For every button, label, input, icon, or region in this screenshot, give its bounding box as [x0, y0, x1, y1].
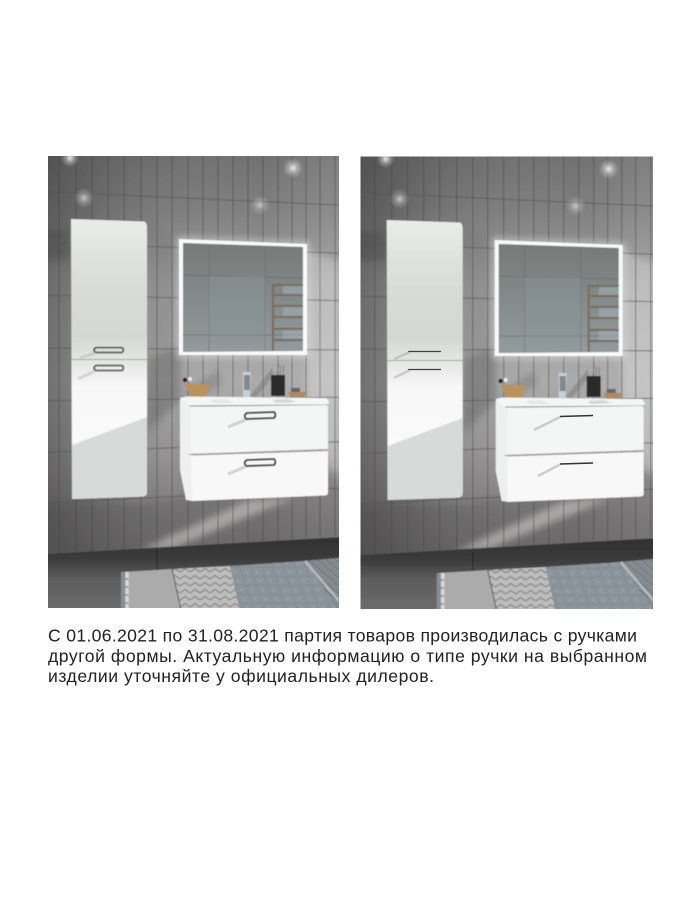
text block: notice about handle shape: [48, 626, 647, 686]
bathroom scene: tiled wall, cabinet, mirror, vanity and rug: [48, 156, 339, 608]
text block: notice about handle shape: изделии уточняйте у официальных дилеров.: [48, 666, 434, 686]
panel: left photo with looped handles: [48, 156, 339, 608]
text block: notice about handle shape: другой формы. Актуальную информацию о типе ручки на выбранном: [48, 646, 647, 666]
icon: straight cabinet handles: [394, 352, 441, 378]
icon: looped vanity handles: [228, 412, 276, 474]
text block: notice about handle shape: С 01.06.2021 по 31.08.2021 партия товаров производилась с ручками: [48, 626, 637, 646]
panel: right photo with straight bar handles: [360, 156, 653, 609]
icon: looped cabinet handles: [78, 348, 124, 379]
bathroom scene: tiled wall, cabinet, mirror, vanity and rug: [360, 156, 653, 609]
icon: straight vanity handles: [534, 416, 593, 476]
